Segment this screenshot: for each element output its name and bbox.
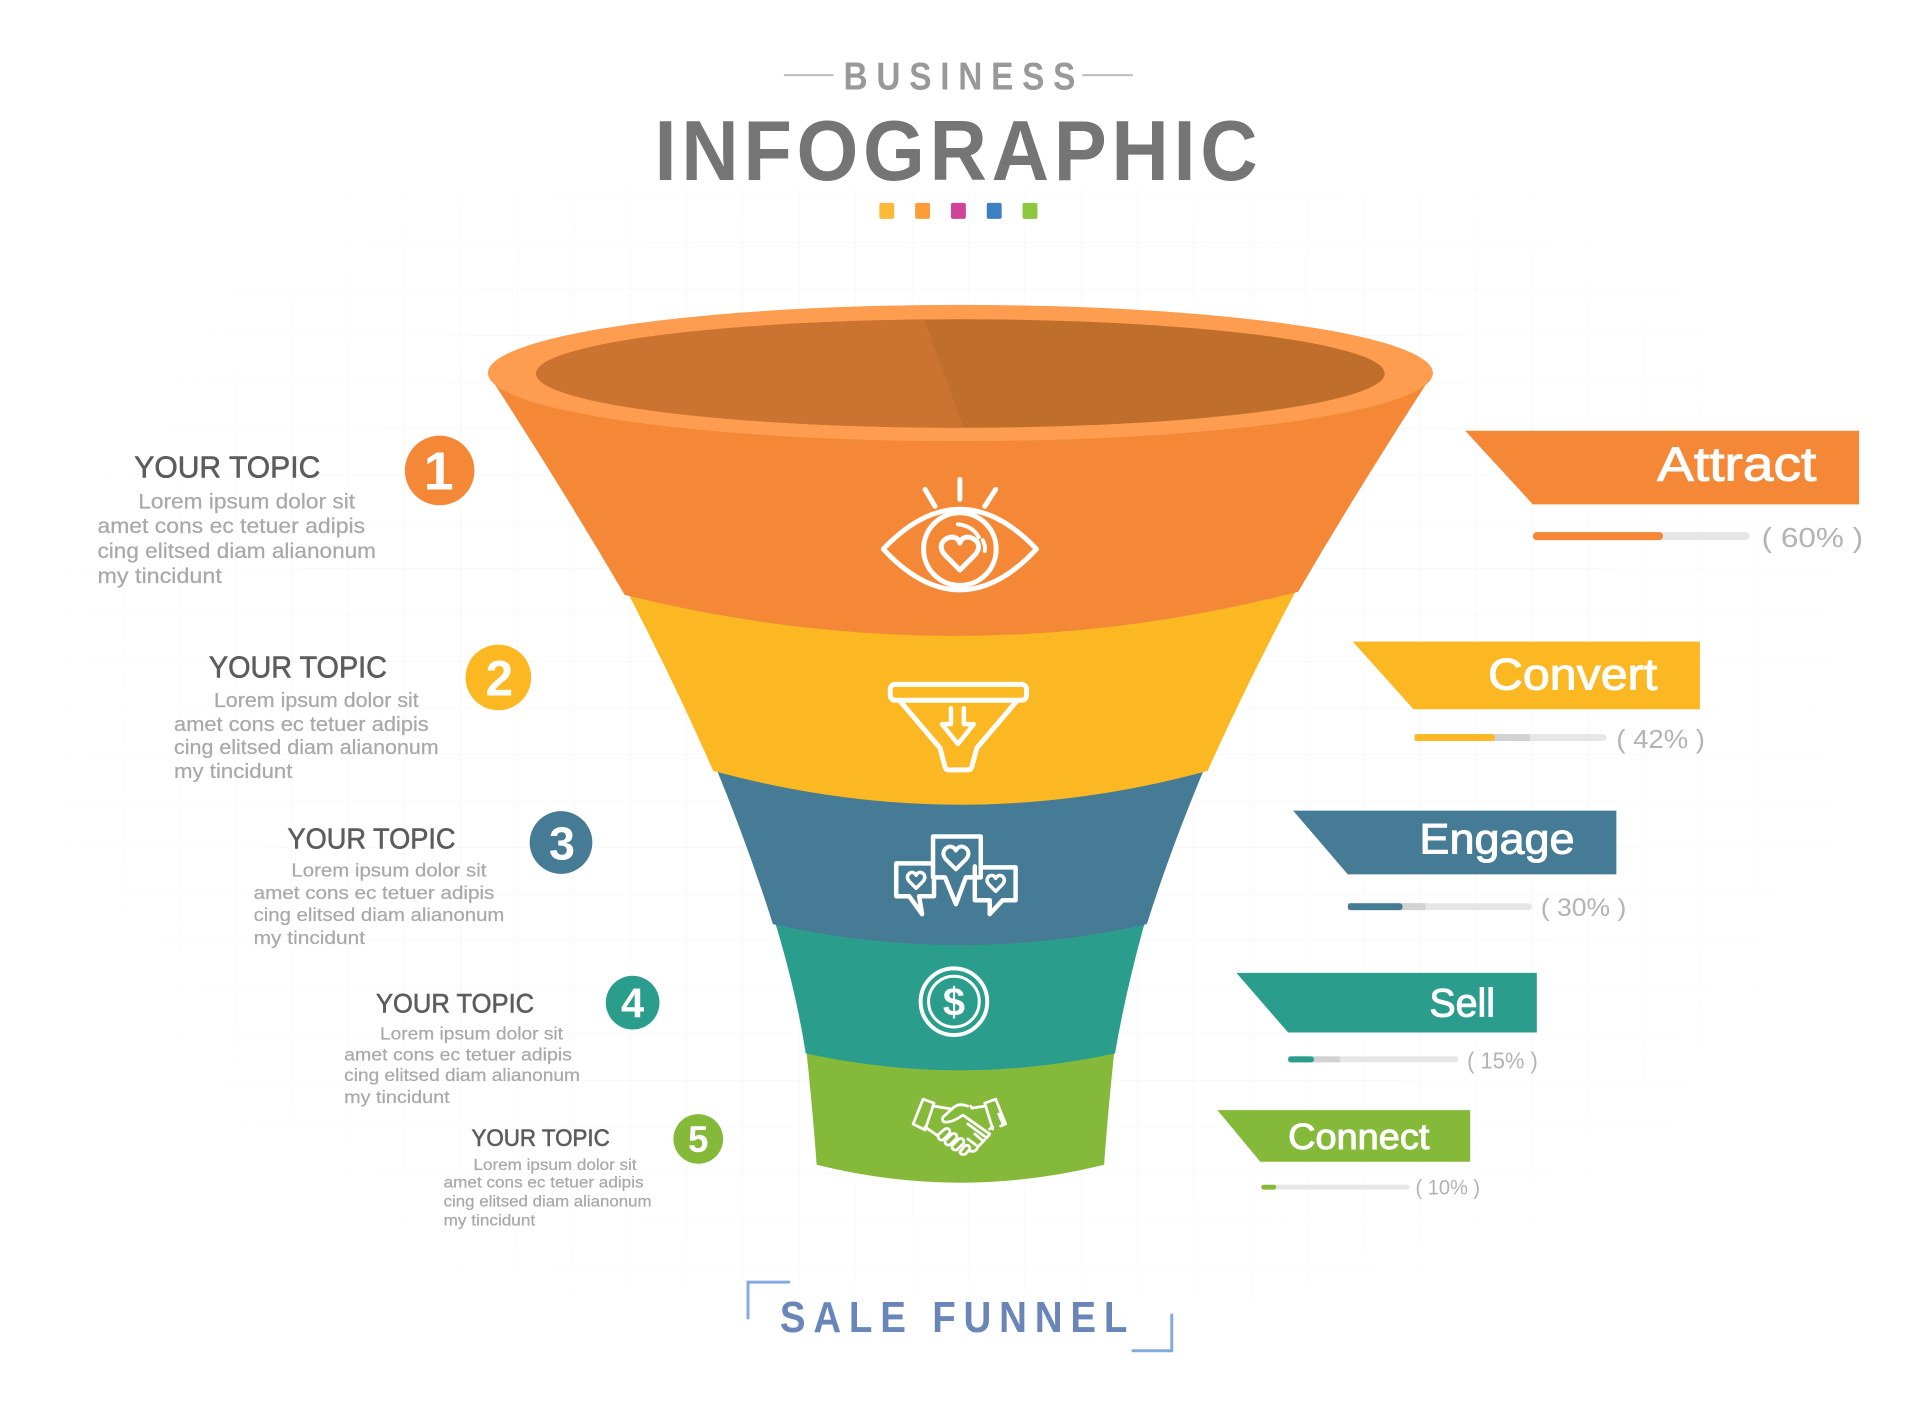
label banner: sell [1236,973,1537,1032]
funnel [487,305,1433,1183]
body text: topic 4: my tincidunt [344,1087,450,1107]
value: 10%: ( 10% ) [1415,1177,1480,1200]
body text: topic 3: amet cons ec tetuer adipis [254,883,494,904]
body text: topic 2: cing elitsed diam alianonum [174,737,439,759]
number badge 1: 1 [424,441,454,501]
funnel band: connect [806,1044,1115,1183]
footer: sale funnel: SALE FUNNEL [780,1293,1127,1341]
panel: topic 2 [174,645,531,783]
label banner: engage: Engage [1419,815,1575,863]
body text: topic 3: cing elitsed diam alianonum [254,905,504,926]
icon: funnel with arrow [890,684,1027,770]
icon: eye with heart [883,479,1036,590]
panel: convert [1353,642,1705,754]
body text: topic 1: cing elitsed diam alianonum [97,540,376,563]
body text: topic 1: amet cons ec tetuer adipis [97,515,365,538]
label banner: convert: Convert [1488,649,1658,699]
progress bar: 42% [1414,734,1606,741]
body text: topic 2 [174,690,439,783]
heading: topic 2: YOUR TOPIC [209,649,387,684]
heading: topic 1: YOUR TOPIC [134,449,320,484]
body text: topic 3 [254,860,504,949]
number badge 3: 3 [549,817,575,869]
progress bar: 15% [1288,1056,1458,1062]
label banner: convert [1353,642,1700,709]
number badge 3 [530,811,592,874]
number badge 1 [405,436,474,505]
funnel band: engage [713,761,1208,945]
panel: topic 3 [254,811,592,949]
number badge 2: 2 [486,650,513,706]
heading: topic 3: YOUR TOPIC [287,823,456,855]
number badge 5: 5 [688,1119,709,1160]
panel: sell [1236,973,1538,1073]
value: 30%: ( 30% ) [1541,894,1626,922]
number badge 5 [673,1114,723,1164]
icon: dollar coin [921,968,987,1035]
body text: topic 5 [444,1157,652,1229]
icon: handshake [913,1099,1006,1155]
progress bar: 60% [1533,532,1750,540]
body text: topic 2: my tincidunt [174,761,293,783]
colour squares [879,203,1037,219]
body text: topic 3: Lorem ipsum dolor sit [291,860,487,881]
number badge 4: 4 [621,980,644,1027]
progress bar: 30% [1348,903,1532,910]
funnel inner opening [536,319,1385,428]
body text: topic 1 [97,490,376,588]
footer: sale funnel [748,1282,1172,1351]
panel: topic 5 [444,1114,723,1229]
panel: connect [1218,1110,1480,1200]
body text: topic 2: Lorem ipsum dolor sit [214,690,419,712]
progress bar: 10% [1261,1185,1409,1190]
panel: engage [1293,811,1626,922]
body text: topic 1: Lorem ipsum dolor sit [138,490,355,513]
body text: topic 5: amet cons ec tetuer adipis [444,1175,644,1192]
label banner: attract [1465,431,1859,504]
body text: topic 2: amet cons ec tetuer adipis [174,714,429,736]
value: 15%: ( 15% ) [1467,1047,1538,1073]
heading: topic 5: YOUR TOPIC [471,1125,610,1152]
number badge 2 [466,645,531,710]
heading: topic 4: YOUR TOPIC [376,989,534,1019]
body text: topic 3: my tincidunt [254,928,366,949]
panel: topic 4 [344,976,659,1107]
value: 42%: ( 42% ) [1616,726,1705,754]
funnel inner shadow side [536,319,964,428]
label banner: sell: Sell [1429,982,1495,1026]
body text: topic 4 [344,1023,580,1107]
body text: topic 1: my tincidunt [97,565,222,588]
label banner: connect [1218,1110,1470,1162]
funnel band: convert [625,587,1298,805]
funnel band: attract [487,373,1433,636]
body text: topic 4: amet cons ec tetuer adipis [344,1044,572,1064]
number badge 4 [606,976,659,1030]
funnel band: sell [773,915,1147,1070]
body text: topic 5: cing elitsed diam alianonum [444,1194,652,1211]
label banner: connect: Connect [1288,1117,1429,1157]
label banner: attract: Attract [1657,438,1816,491]
body text: topic 5: my tincidunt [444,1212,536,1229]
body text: topic 5: Lorem ipsum dolor sit [473,1157,637,1174]
funnel rim [488,305,1433,441]
title: business: BUSINESS [844,54,1075,98]
body text: topic 4: Lorem ipsum dolor sit [380,1023,563,1043]
label banner: engage [1293,811,1616,874]
panel: topic 1 [97,436,474,588]
icon: dollar coin: $ [943,981,965,1025]
panel: attract [1465,431,1863,553]
icon: speech bubbles with hearts [896,837,1016,914]
value: 60%: ( 60% ) [1762,522,1863,553]
title: infographic: INFOGRAPHIC [655,102,1258,199]
body text: topic 4: cing elitsed diam alianonum [344,1065,580,1085]
